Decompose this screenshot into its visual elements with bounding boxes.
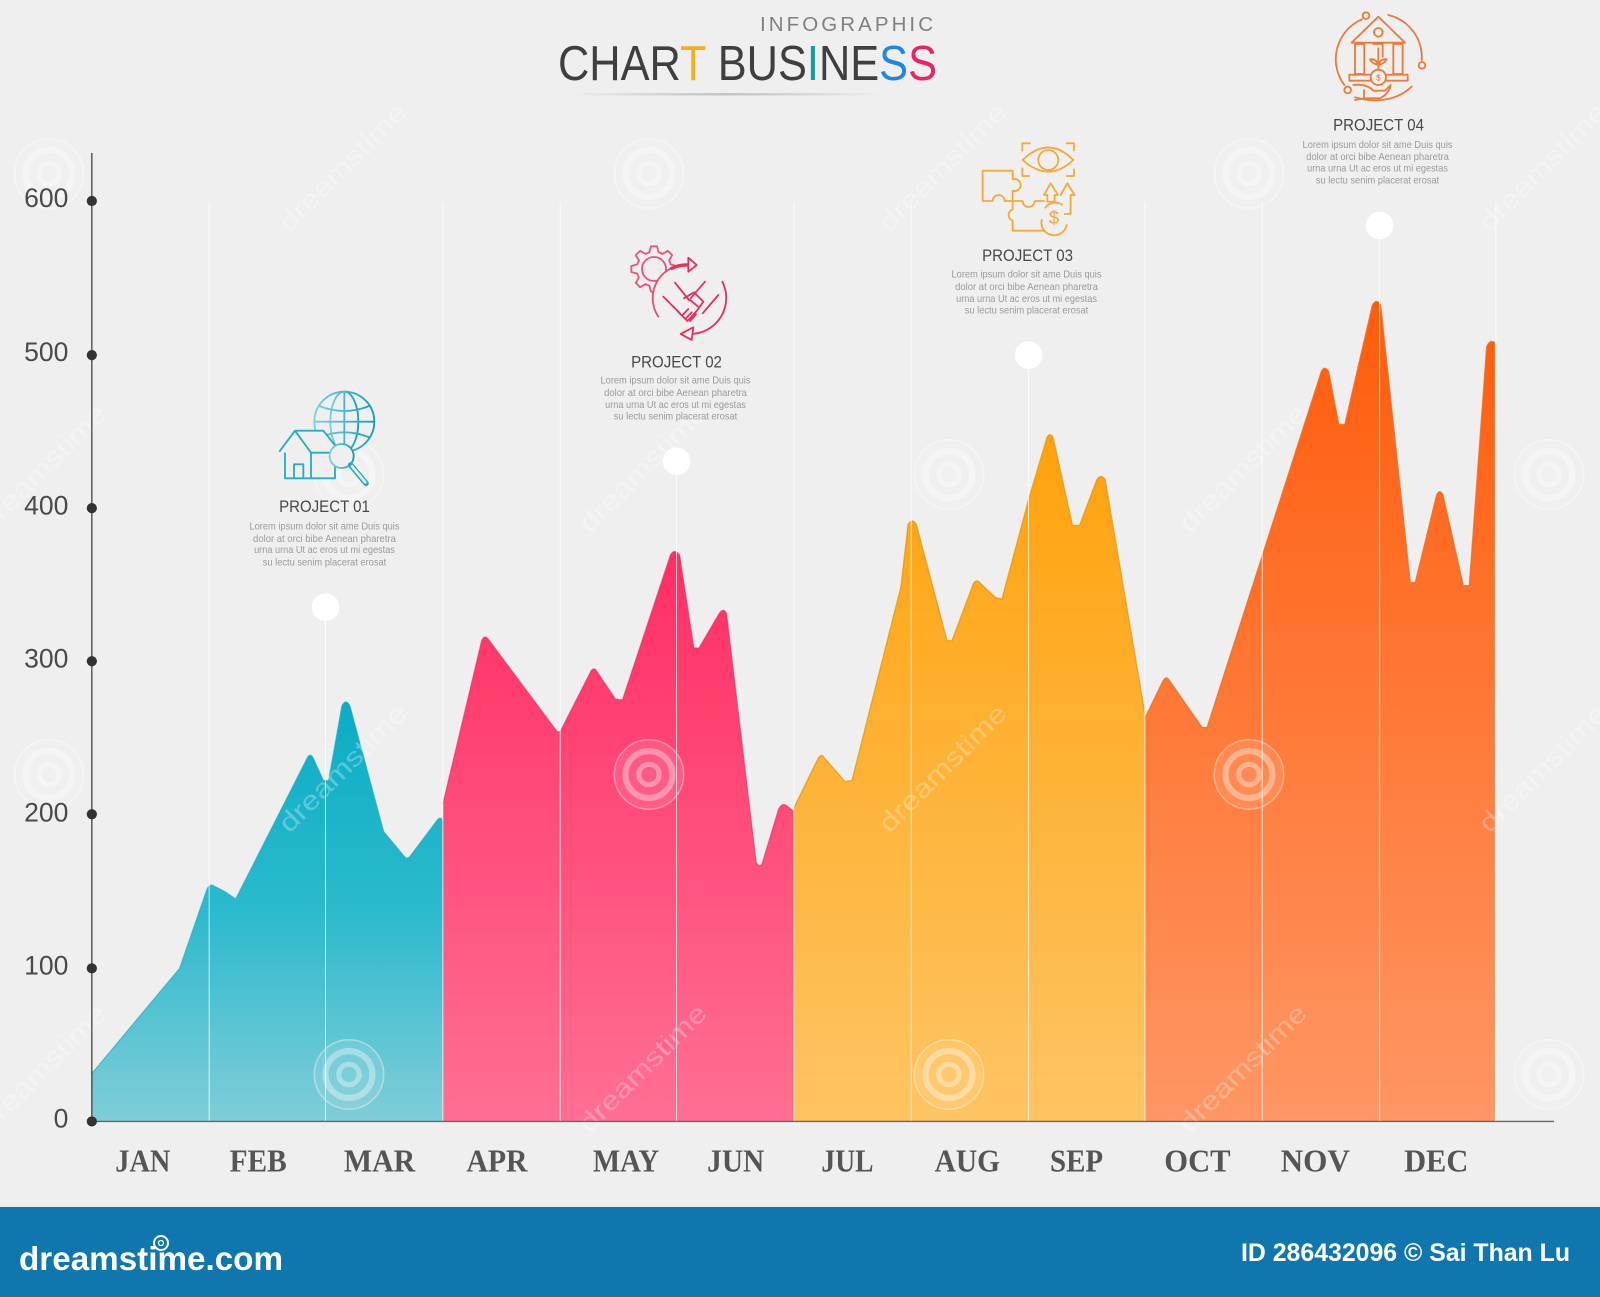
footer banner xyxy=(0,1207,1600,1297)
month labels: JUL xyxy=(821,1143,873,1178)
icon: eye puzzle dollar xyxy=(983,143,1075,235)
project 02 text: Lorem ipsum dolor sit ame Duis quis xyxy=(601,376,751,387)
project 03 text xyxy=(952,246,1102,316)
month labels: JAN xyxy=(115,1143,171,1178)
title underline xyxy=(570,93,880,96)
y axis: 600 xyxy=(24,183,68,213)
project 02 text: PROJECT 02 xyxy=(631,352,722,371)
icon: house globe magnifier xyxy=(279,392,374,483)
watermark: dreamstime xyxy=(1472,698,1600,838)
project 03 text: PROJECT 03 xyxy=(982,246,1073,265)
month labels: SEP xyxy=(1050,1143,1103,1178)
project 01 text: urna urna Ut ac eros ut mi egestas xyxy=(254,545,395,556)
month labels: FEB xyxy=(230,1143,287,1178)
month labels: OCT xyxy=(1164,1143,1231,1178)
month labels xyxy=(115,1143,1468,1178)
watermark: dreamstime xyxy=(272,97,413,237)
project 04 text: urna urna Ut ac eros ut mi egestas xyxy=(1307,163,1448,174)
y axis: 300 xyxy=(24,643,68,673)
title: chart business: CHART BUSINESS xyxy=(558,37,937,91)
project 03 text: Lorem ipsum dolor sit ame Duis quis xyxy=(952,270,1102,281)
y axis: 500 xyxy=(24,337,68,367)
project 02 text xyxy=(601,352,751,422)
project 01 text: dolor at orci bibe Aenean pharetra xyxy=(253,534,396,545)
project 03 text: su lectu senim placerat erosat xyxy=(965,305,1089,316)
month labels: AUG xyxy=(935,1143,1000,1178)
project 03 marker xyxy=(1015,341,1042,369)
project 04 text: Lorem ipsum dolor sit ame Duis quis xyxy=(1303,140,1453,151)
watermark: dreamstime xyxy=(872,97,1013,237)
project 02 text: urna urna Ut ac eros ut mi egestas xyxy=(605,400,746,411)
project 02 text: dolor at orci bibe Aenean pharetra xyxy=(604,388,747,399)
icon: bank and plant: $ xyxy=(1376,73,1381,82)
watermark: dreamstime xyxy=(572,398,713,538)
watermark: dreamstime xyxy=(872,698,1013,838)
y axis: 200 xyxy=(24,797,68,827)
project 04 text: PROJECT 04 xyxy=(1333,116,1424,135)
project 04 marker xyxy=(1366,212,1393,239)
watermark: dreamstime xyxy=(272,698,413,838)
icon: eye puzzle dollar: $ xyxy=(1049,207,1060,228)
month labels: APR xyxy=(466,1143,529,1178)
month labels: MAY xyxy=(593,1143,659,1178)
title xyxy=(558,13,937,96)
project 01 marker xyxy=(312,593,339,621)
area: apr to jun pink xyxy=(443,552,794,1121)
title: infographic: INFOGRAPHIC xyxy=(760,13,933,36)
month labels: MAR xyxy=(344,1143,416,1178)
project 01 text: PROJECT 01 xyxy=(279,497,370,516)
project 01 text: su lectu senim placerat erosat xyxy=(263,557,386,568)
watermark: dreamstime xyxy=(1172,998,1313,1138)
project 02 text: su lectu senim placerat erosat xyxy=(614,411,738,422)
icon: bank and plant xyxy=(1336,12,1425,100)
area: jul to sep yellow xyxy=(794,435,1145,1121)
y axis: 0 xyxy=(54,1104,68,1134)
month labels: JUN xyxy=(707,1143,764,1178)
footer logo: dreamstime.com xyxy=(19,1240,283,1277)
area: oct to dec orange xyxy=(1145,302,1495,1121)
project 03 text: dolor at orci bibe Aenean pharetra xyxy=(955,282,1098,293)
y axis xyxy=(24,153,1554,1134)
project 04 text: su lectu senim placerat erosat xyxy=(1316,176,1440,187)
watermark: dreamstime xyxy=(1172,398,1313,538)
project 01 text xyxy=(249,497,400,568)
month labels: DEC xyxy=(1404,1143,1468,1178)
area: jan to mar teal xyxy=(92,702,443,1121)
project 02 marker xyxy=(663,447,690,475)
y axis: 100 xyxy=(24,950,68,980)
month labels: NOV xyxy=(1281,1143,1350,1178)
project 01 text: Lorem ipsum dolor sit ame Duis quis xyxy=(249,522,400,533)
y axis: 400 xyxy=(24,490,68,520)
footer id credit: ID 286432096 © Sai Than Lu xyxy=(1241,1239,1570,1267)
project 03 text: urna urna Ut ac eros ut mi egestas xyxy=(956,294,1097,305)
project 04 text xyxy=(1303,116,1453,187)
watermark: dreamstime xyxy=(572,998,713,1138)
project 04 text: dolor at orci bibe Aenean pharetra xyxy=(1306,152,1449,163)
area chart xyxy=(92,302,1495,1121)
watermark: dreamstime xyxy=(1472,97,1600,237)
icon: gear and handshake xyxy=(631,246,726,340)
